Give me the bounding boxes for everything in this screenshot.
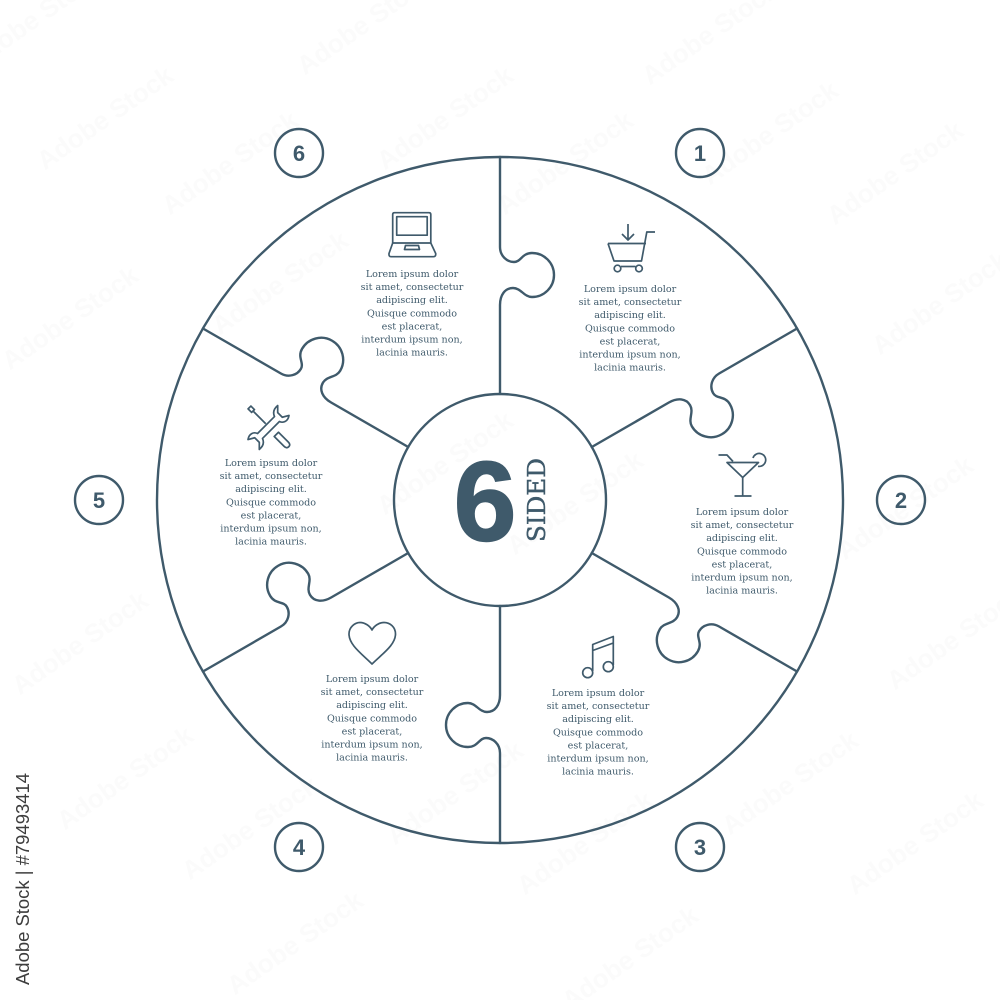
- number badge 5: [75, 476, 123, 524]
- text block 6: sit amet, consectetur: [361, 282, 464, 293]
- text: Adobe Stock: [51, 719, 199, 835]
- text block 5: lacinia mauris.: [235, 537, 307, 548]
- text block 2: Quisque commodo: [697, 546, 787, 557]
- text block 1: adipiscing elit.: [594, 310, 666, 321]
- text block 1: est placerat,: [600, 336, 660, 347]
- text block 4: sit amet, consectetur: [321, 687, 424, 698]
- text block 3: est placerat,: [568, 740, 628, 751]
- icon: heart: [349, 622, 396, 664]
- text block 4: Quisque commodo: [327, 713, 417, 724]
- text block 1: sit amet, consectetur: [579, 297, 682, 308]
- text block 1: Quisque commodo: [585, 323, 675, 334]
- text block 1: Lorem ipsum dolor: [584, 284, 677, 295]
- text block 2: est placerat,: [712, 559, 772, 570]
- number badge 3: 3: [694, 835, 706, 860]
- text block 3: Quisque commodo: [553, 727, 643, 738]
- icon: wrench and screwdriver: [246, 405, 291, 450]
- text: Adobe Stock: [381, 734, 529, 850]
- icon: laptop: [389, 213, 436, 257]
- text: Adobe Stock: [156, 104, 304, 220]
- text block 4: interdum ipsum non,: [321, 740, 423, 750]
- number badge 4: [275, 823, 323, 871]
- center label: 6 sided: [454, 438, 551, 564]
- text: Adobe Stock: [831, 449, 979, 565]
- text: Adobe Stock: [6, 584, 154, 700]
- text: Adobe Stock: [716, 724, 864, 840]
- number badge 1: [676, 129, 724, 177]
- text block 3: Lorem ipsum dolor: [552, 688, 645, 699]
- text block 6: interdum ipsum non,: [361, 334, 463, 346]
- text block 5: adipiscing elit.: [235, 484, 307, 495]
- text block 5: Lorem ipsum dolor: [225, 458, 318, 469]
- text block 6: adipiscing elit.: [376, 295, 448, 306]
- text: Adobe Stock: [31, 59, 179, 175]
- text block 4: Lorem ipsum dolor: [326, 674, 419, 685]
- number badge 6: 6: [293, 141, 305, 166]
- icon: martini glass: [718, 453, 766, 496]
- text: Adobe Stock: [371, 59, 519, 175]
- text block 2: interdum ipsum non,: [691, 572, 793, 584]
- text block 6: est placerat,: [382, 321, 442, 332]
- text block 2: sit amet, consectetur: [691, 520, 794, 531]
- text block 4: adipiscing elit.: [336, 700, 408, 711]
- text block 1: lacinia mauris.: [594, 363, 666, 374]
- number badge 2: [877, 476, 925, 524]
- icon: shopping cart: [608, 224, 655, 272]
- text: Adobe Stock: [841, 784, 989, 900]
- text block 6: Quisque commodo: [367, 308, 457, 319]
- number badge 1: 1: [694, 141, 706, 166]
- text block 4: est placerat,: [342, 726, 402, 737]
- number badge 5: 5: [93, 488, 105, 513]
- text block 5: sit amet, consectetur: [220, 471, 323, 482]
- text: Adobe Stock: [371, 404, 519, 520]
- text: Adobe Stock: [0, 259, 144, 375]
- text block 2: adipiscing elit.: [706, 533, 778, 544]
- text block 2: lacinia mauris.: [706, 586, 778, 597]
- text: Adobe Stock: [176, 769, 324, 885]
- number badge 3: [676, 823, 724, 871]
- text: Adobe Stock: [491, 104, 639, 220]
- text block 1: interdum ipsum non,: [579, 350, 681, 360]
- text block 5: interdum ipsum non,: [220, 524, 322, 534]
- text block 5: est placerat,: [241, 510, 301, 521]
- text: Adobe Stock: [821, 114, 969, 230]
- number badge 4: 4: [293, 835, 306, 860]
- center label: 6 sided: SIDED: [523, 458, 551, 542]
- text: Adobe Stock: [696, 74, 844, 190]
- text block 3: adipiscing elit.: [562, 714, 634, 725]
- text block 6: Lorem ipsum dolor: [366, 269, 459, 280]
- text: Adobe Stock: [511, 784, 659, 900]
- text: Adobe Stock: [206, 224, 354, 340]
- puzzle wheel outline: [157, 157, 843, 843]
- text block 4: lacinia mauris.: [336, 753, 408, 764]
- text block 3: lacinia mauris.: [562, 767, 634, 778]
- text block 3: interdum ipsum non,: [547, 754, 649, 764]
- text block 2: Lorem ipsum dolor: [696, 507, 789, 518]
- number badge 2: 2: [895, 488, 907, 513]
- text block 5: Quisque commodo: [226, 497, 316, 508]
- icon: music notes: [583, 636, 613, 678]
- text: Adobe Stock: [221, 884, 369, 1000]
- number badge 6: [275, 129, 323, 177]
- side credit text: Adobe Stock | #79493414: [13, 773, 33, 985]
- center label: 6 sided: 6: [454, 438, 516, 564]
- text block 3: sit amet, consectetur: [547, 701, 650, 712]
- text block 6: lacinia mauris.: [376, 348, 448, 359]
- text: Adobe Stock: [501, 444, 649, 560]
